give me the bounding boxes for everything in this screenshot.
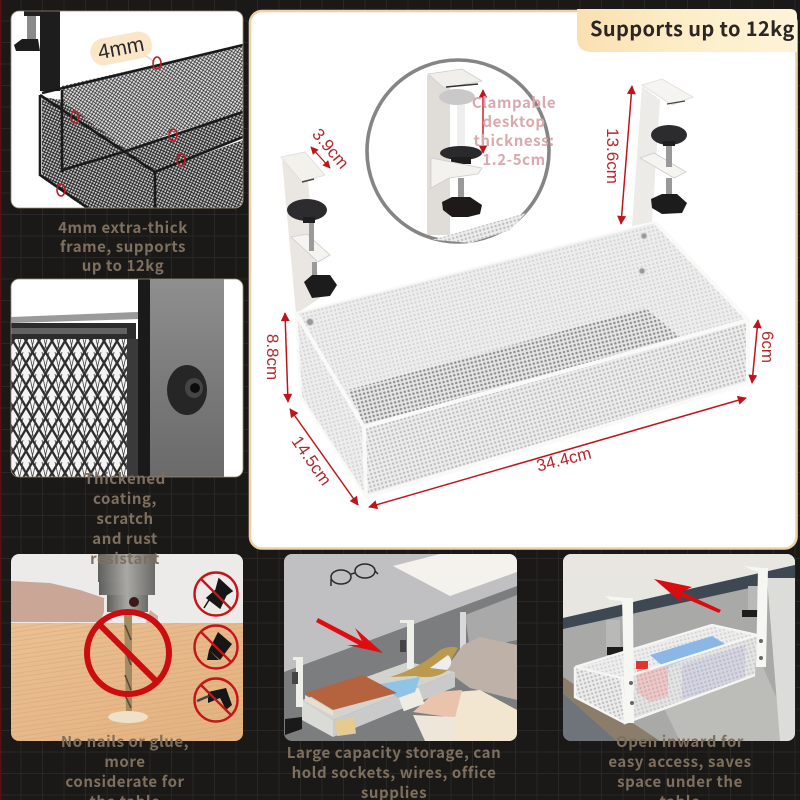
caption: open inward: space under the (617, 771, 743, 792)
notebook (305, 675, 397, 716)
dark floor (285, 717, 302, 735)
panel: coating close-up photo (11, 279, 243, 477)
inset star nut (442, 197, 482, 217)
dimension: 13.6cm (603, 86, 632, 224)
caption: no drilling: considerate for (65, 771, 185, 792)
dimension: 13.6cm: 13.6cm (603, 128, 622, 184)
dimension: 34.4cm: 34.4cm (535, 444, 593, 475)
mesh basket back wall (62, 46, 243, 150)
inset mesh corner (432, 213, 526, 243)
left clamp bracket (281, 152, 337, 314)
mesh close-up (11, 339, 127, 477)
paper sheet (393, 554, 517, 596)
tray brackets (292, 620, 414, 707)
desk top (563, 554, 795, 618)
mesh basket left side and floor (42, 97, 155, 208)
inset circle: clamp detail (367, 60, 556, 243)
screw dot (629, 639, 763, 705)
panel: no drilling photo (11, 554, 243, 741)
sawdust (108, 711, 148, 723)
top rail (11, 312, 138, 339)
basket black frame (40, 45, 243, 208)
basket back wall (296, 222, 655, 390)
inset red thickness arrow (482, 90, 484, 153)
panel: open inward photo (563, 554, 795, 741)
inset lower jaw (431, 158, 482, 188)
dimension: 14.5cm (288, 409, 358, 505)
grey bracket (150, 279, 224, 477)
basket front wall (364, 320, 748, 497)
left clamp (606, 620, 623, 655)
icon: no pushpin (194, 572, 238, 616)
caption: coating: coating, (93, 488, 157, 509)
badge: load capacity (577, 9, 797, 52)
icon: hex screw (167, 365, 207, 415)
screws (306, 233, 647, 326)
caption: storage capacity: hold sockets, wires, office (292, 762, 496, 783)
icon: no power drill (194, 678, 238, 722)
red arrow (654, 579, 721, 613)
caption: open inward: Open inward for (616, 731, 744, 752)
inset ghost knob (439, 89, 475, 105)
caption: storage capacity: Large capacity storage, can (287, 742, 501, 763)
basket right side (646, 222, 748, 337)
black post (127, 279, 150, 477)
red arrow (316, 618, 383, 653)
gold bird ornament (390, 647, 458, 677)
dimension: 3.9cm: 3.9cm (308, 125, 353, 173)
caption: coating: and rust (92, 528, 158, 549)
icon: black clamp knob (14, 11, 60, 91)
inset faded label: Clampable (472, 92, 556, 113)
basket left side (296, 313, 366, 497)
storage tray (302, 662, 455, 737)
inset faded label: 1.2-5cm (482, 149, 546, 170)
seated person's legs (413, 637, 517, 741)
panel: storage capacity photo (284, 554, 517, 741)
caption: coating: resistant (90, 548, 160, 569)
white brackets (605, 566, 768, 723)
right clamp bracket (632, 79, 693, 226)
lower wall (660, 660, 795, 741)
dimension: 6cm (752, 320, 777, 383)
white mesh basket (575, 625, 757, 723)
caption: coating: Thickened (84, 468, 166, 489)
desk leg (460, 612, 466, 649)
icon: red thickness markers (57, 57, 185, 196)
inset clamp body (427, 75, 450, 235)
right clamp (742, 586, 758, 617)
mesh basket far floor (125, 112, 243, 172)
panel: thick frame photo (11, 11, 243, 208)
caption: coating: scratch (96, 508, 154, 529)
wall behind desk (466, 595, 517, 642)
caption: thick frame: frame, supports (60, 236, 186, 257)
inset black knob (440, 146, 482, 160)
badge: load capacity: Supports up to 12kg (590, 13, 795, 42)
caption: open inward: easy access, saves (608, 751, 752, 772)
dimension: 8.8cm (263, 313, 288, 402)
drill bit (124, 612, 132, 716)
desk dark edge (563, 565, 795, 629)
callout: 4mm: 4mm (96, 33, 146, 64)
inset faded label: thickness: (474, 130, 554, 151)
icon: large prohibition sign (87, 612, 169, 694)
dimension: 14.5cm: 14.5cm (288, 432, 335, 489)
dimension: 8.8cm: 8.8cm (263, 334, 282, 380)
caption: no drilling: more (104, 751, 146, 772)
drill chuck (98, 554, 155, 612)
floor carpet (563, 693, 617, 741)
icon: glasses (331, 564, 378, 586)
caption: no drilling: No nails or glue, (61, 731, 189, 752)
main panel: dimension diagram (250, 11, 796, 548)
icon: no screw anchor (194, 626, 238, 668)
hand (11, 581, 104, 622)
basket white frame (296, 222, 748, 497)
mesh basket front wall (155, 140, 243, 208)
basket floor (348, 308, 680, 425)
dimension: 6cm: 6cm (758, 331, 777, 363)
inset faded label: desktop (482, 111, 546, 132)
dimension: 34.4cm (369, 398, 746, 507)
desk top (284, 554, 517, 672)
caption: thick frame: up to 12kg (82, 255, 164, 276)
caption: thick frame: 4mm extra-thick (58, 217, 188, 238)
